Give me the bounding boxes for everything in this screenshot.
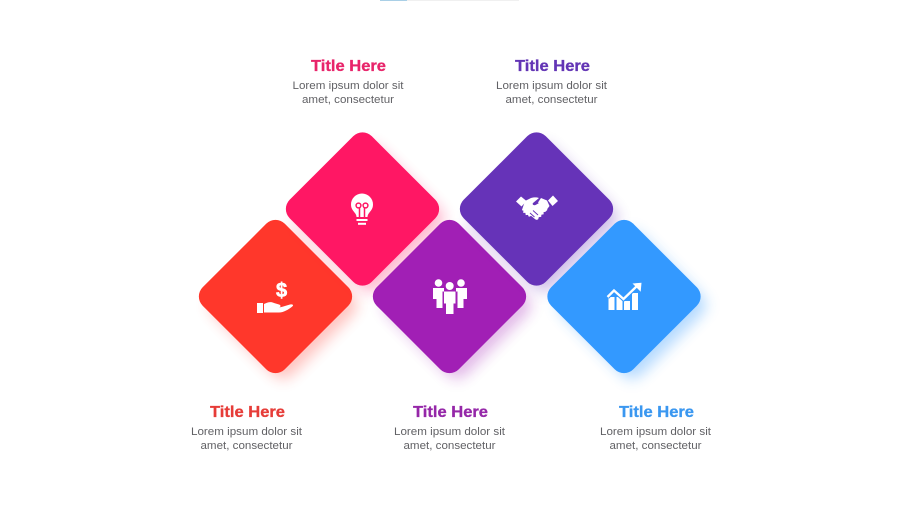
text block: pink: Lorem ipsum dolor sit [292, 80, 404, 92]
text block: blue: Title Here [619, 404, 694, 421]
diamond: red [193, 214, 362, 384]
text block: pink: Title Here [311, 58, 386, 75]
text block: indigo: Lorem ipsum dolor sit [496, 80, 607, 92]
text block: pink [292, 58, 404, 106]
text block: blue: Lorem ipsum dolor sit [600, 426, 711, 438]
text block: violet [394, 404, 505, 452]
icon: hand with dollar [257, 280, 293, 313]
text block: violet: Title Here [413, 404, 488, 421]
text block: red: amet, consectetur [200, 440, 293, 452]
text block: violet: Lorem ipsum dolor sit [394, 426, 505, 438]
text block: indigo [496, 58, 607, 106]
text block: pink: amet, consectetur [302, 94, 394, 106]
text block: blue [600, 404, 711, 452]
diamond: violet [367, 214, 536, 384]
text block: indigo: amet, consectetur [506, 94, 598, 106]
text block: violet: amet, consectetur [404, 440, 496, 452]
icon: hand with dollar: $ [276, 280, 287, 302]
top edge line [380, 0, 519, 1]
text block: red: Lorem ipsum dolor sit [191, 426, 302, 438]
diamond: pink [280, 127, 449, 297]
icon: light bulb [351, 194, 373, 225]
text block: indigo: Title Here [515, 58, 590, 75]
diamond: indigo [454, 127, 623, 297]
text block: red: Title Here [210, 404, 285, 421]
icon: handshake [516, 196, 558, 220]
diamond: blue [542, 214, 711, 384]
icon: group of people [433, 279, 467, 314]
text block: blue: amet, consectetur [610, 440, 702, 452]
icon: growth chart [608, 283, 642, 310]
text block: red [191, 404, 302, 452]
